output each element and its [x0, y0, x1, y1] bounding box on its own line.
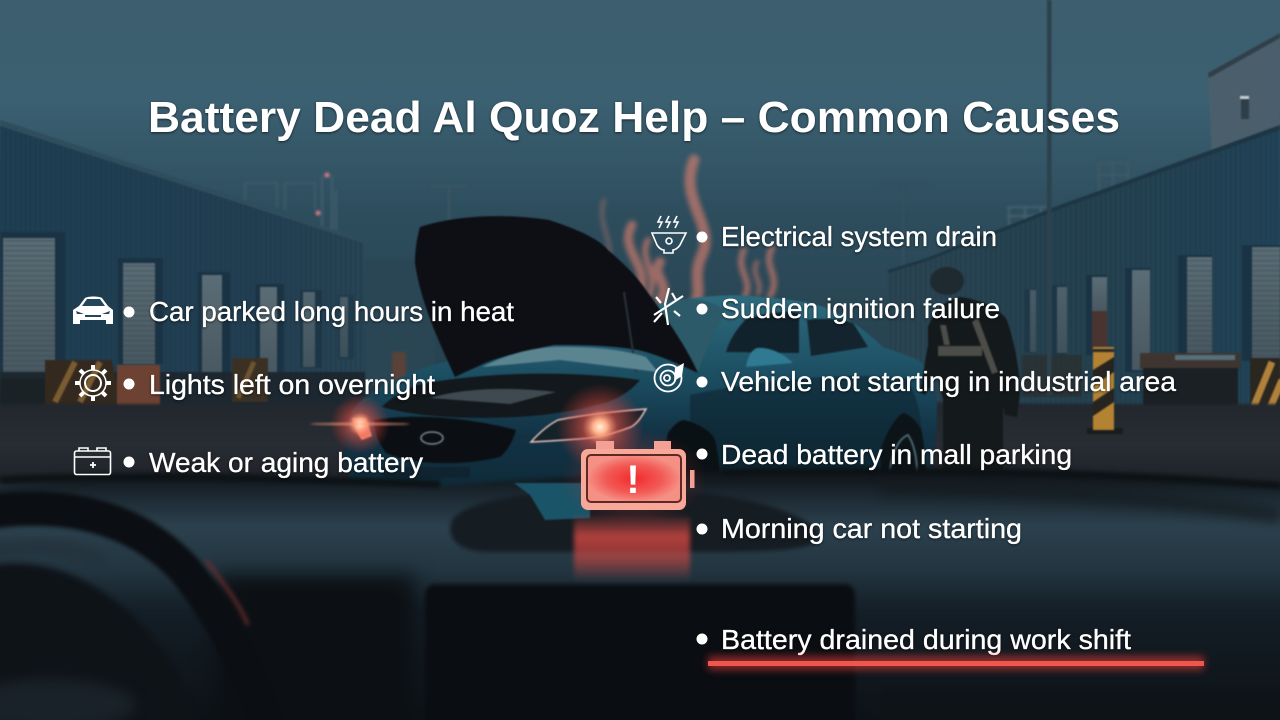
illustration: blue car with raised hood	[344, 216, 937, 505]
left list of causes	[73, 296, 514, 478]
car lower bumper seen through recess	[514, 483, 590, 520]
upper right shadow band	[880, 488, 1280, 516]
steering wheel rim	[0, 509, 268, 720]
icon: brake disc	[654, 363, 684, 392]
list item: electrical drain	[652, 216, 997, 253]
right list of causes	[652, 216, 1204, 670]
rear window	[807, 319, 868, 356]
hood	[415, 216, 698, 377]
list item: mall parking: Dead battery in mall parking	[721, 439, 1072, 470]
wheel rear	[881, 413, 926, 490]
hood strut	[624, 292, 636, 372]
icon: lightning bowl	[652, 216, 686, 253]
body	[920, 297, 1020, 470]
list item: electrical drain: Electrical system drain	[721, 221, 997, 252]
left bluish stalk	[0, 547, 105, 562]
front windscreen	[482, 347, 658, 372]
list item: work shift: Battery drained during work shift	[721, 624, 1131, 655]
engine bay	[382, 374, 640, 418]
background: right warehouse	[888, 0, 1280, 410]
icon: battery	[74, 448, 110, 474]
wheel hub	[0, 679, 135, 720]
wheel front	[664, 420, 720, 505]
dim red rim light	[206, 560, 248, 625]
instrument recess	[450, 490, 819, 552]
lower left shadow	[215, 575, 415, 720]
side mirror	[746, 348, 793, 367]
icon: snowflake spark	[654, 288, 683, 325]
icon: dead battery warning	[560, 428, 708, 528]
glow: left headlamp	[310, 394, 410, 454]
door shadow	[690, 376, 923, 490]
glow: red reflection on dashboard	[574, 516, 690, 582]
list item: industrial area: Vehicle not starting in industrial area	[721, 366, 1176, 397]
list item: ignition failure	[654, 288, 1000, 325]
side window	[726, 312, 799, 353]
dark upper dashboard edge	[0, 471, 1280, 486]
ground	[0, 404, 1280, 484]
icon: gear	[75, 365, 111, 401]
list item: lights left on: Lights left on overnight	[149, 369, 435, 400]
background: left warehouse	[0, 120, 406, 410]
centre console	[425, 584, 855, 720]
traffic barrier	[1087, 347, 1123, 434]
exclamation mark: !	[626, 458, 640, 502]
glow: right headlamp	[556, 383, 644, 471]
illustration: person standing behind the car	[920, 267, 1020, 470]
headlight right	[531, 409, 646, 442]
windshield	[655, 299, 726, 372]
list item: morning: Morning car not starting	[721, 513, 1022, 544]
reflective vest strips	[938, 318, 998, 374]
illustration: blurred dashboard	[0, 471, 1280, 720]
head	[930, 267, 964, 295]
dark area inside wheel	[0, 563, 200, 720]
illustration: heat waves above the engine	[602, 160, 774, 300]
list item: weak battery: Weak or aging battery	[149, 447, 423, 478]
background: hazy distant building	[365, 260, 435, 385]
lower right vent	[880, 688, 1280, 720]
car roof and body	[344, 295, 937, 495]
list item: car parked: Car parked long hours in heat	[149, 296, 514, 327]
background: distant industrial structures	[245, 163, 1130, 300]
list item: lights left on	[75, 365, 435, 401]
title: Battery Dead Al Quoz Help – Common Causes	[148, 93, 1120, 142]
lower bumper panel	[378, 467, 470, 478]
grille	[374, 417, 516, 463]
icon: car	[73, 296, 113, 324]
left lamp housing	[352, 418, 372, 440]
list item: ignition failure: Sudden ignition failure	[721, 293, 1000, 324]
red underline	[708, 656, 1204, 670]
